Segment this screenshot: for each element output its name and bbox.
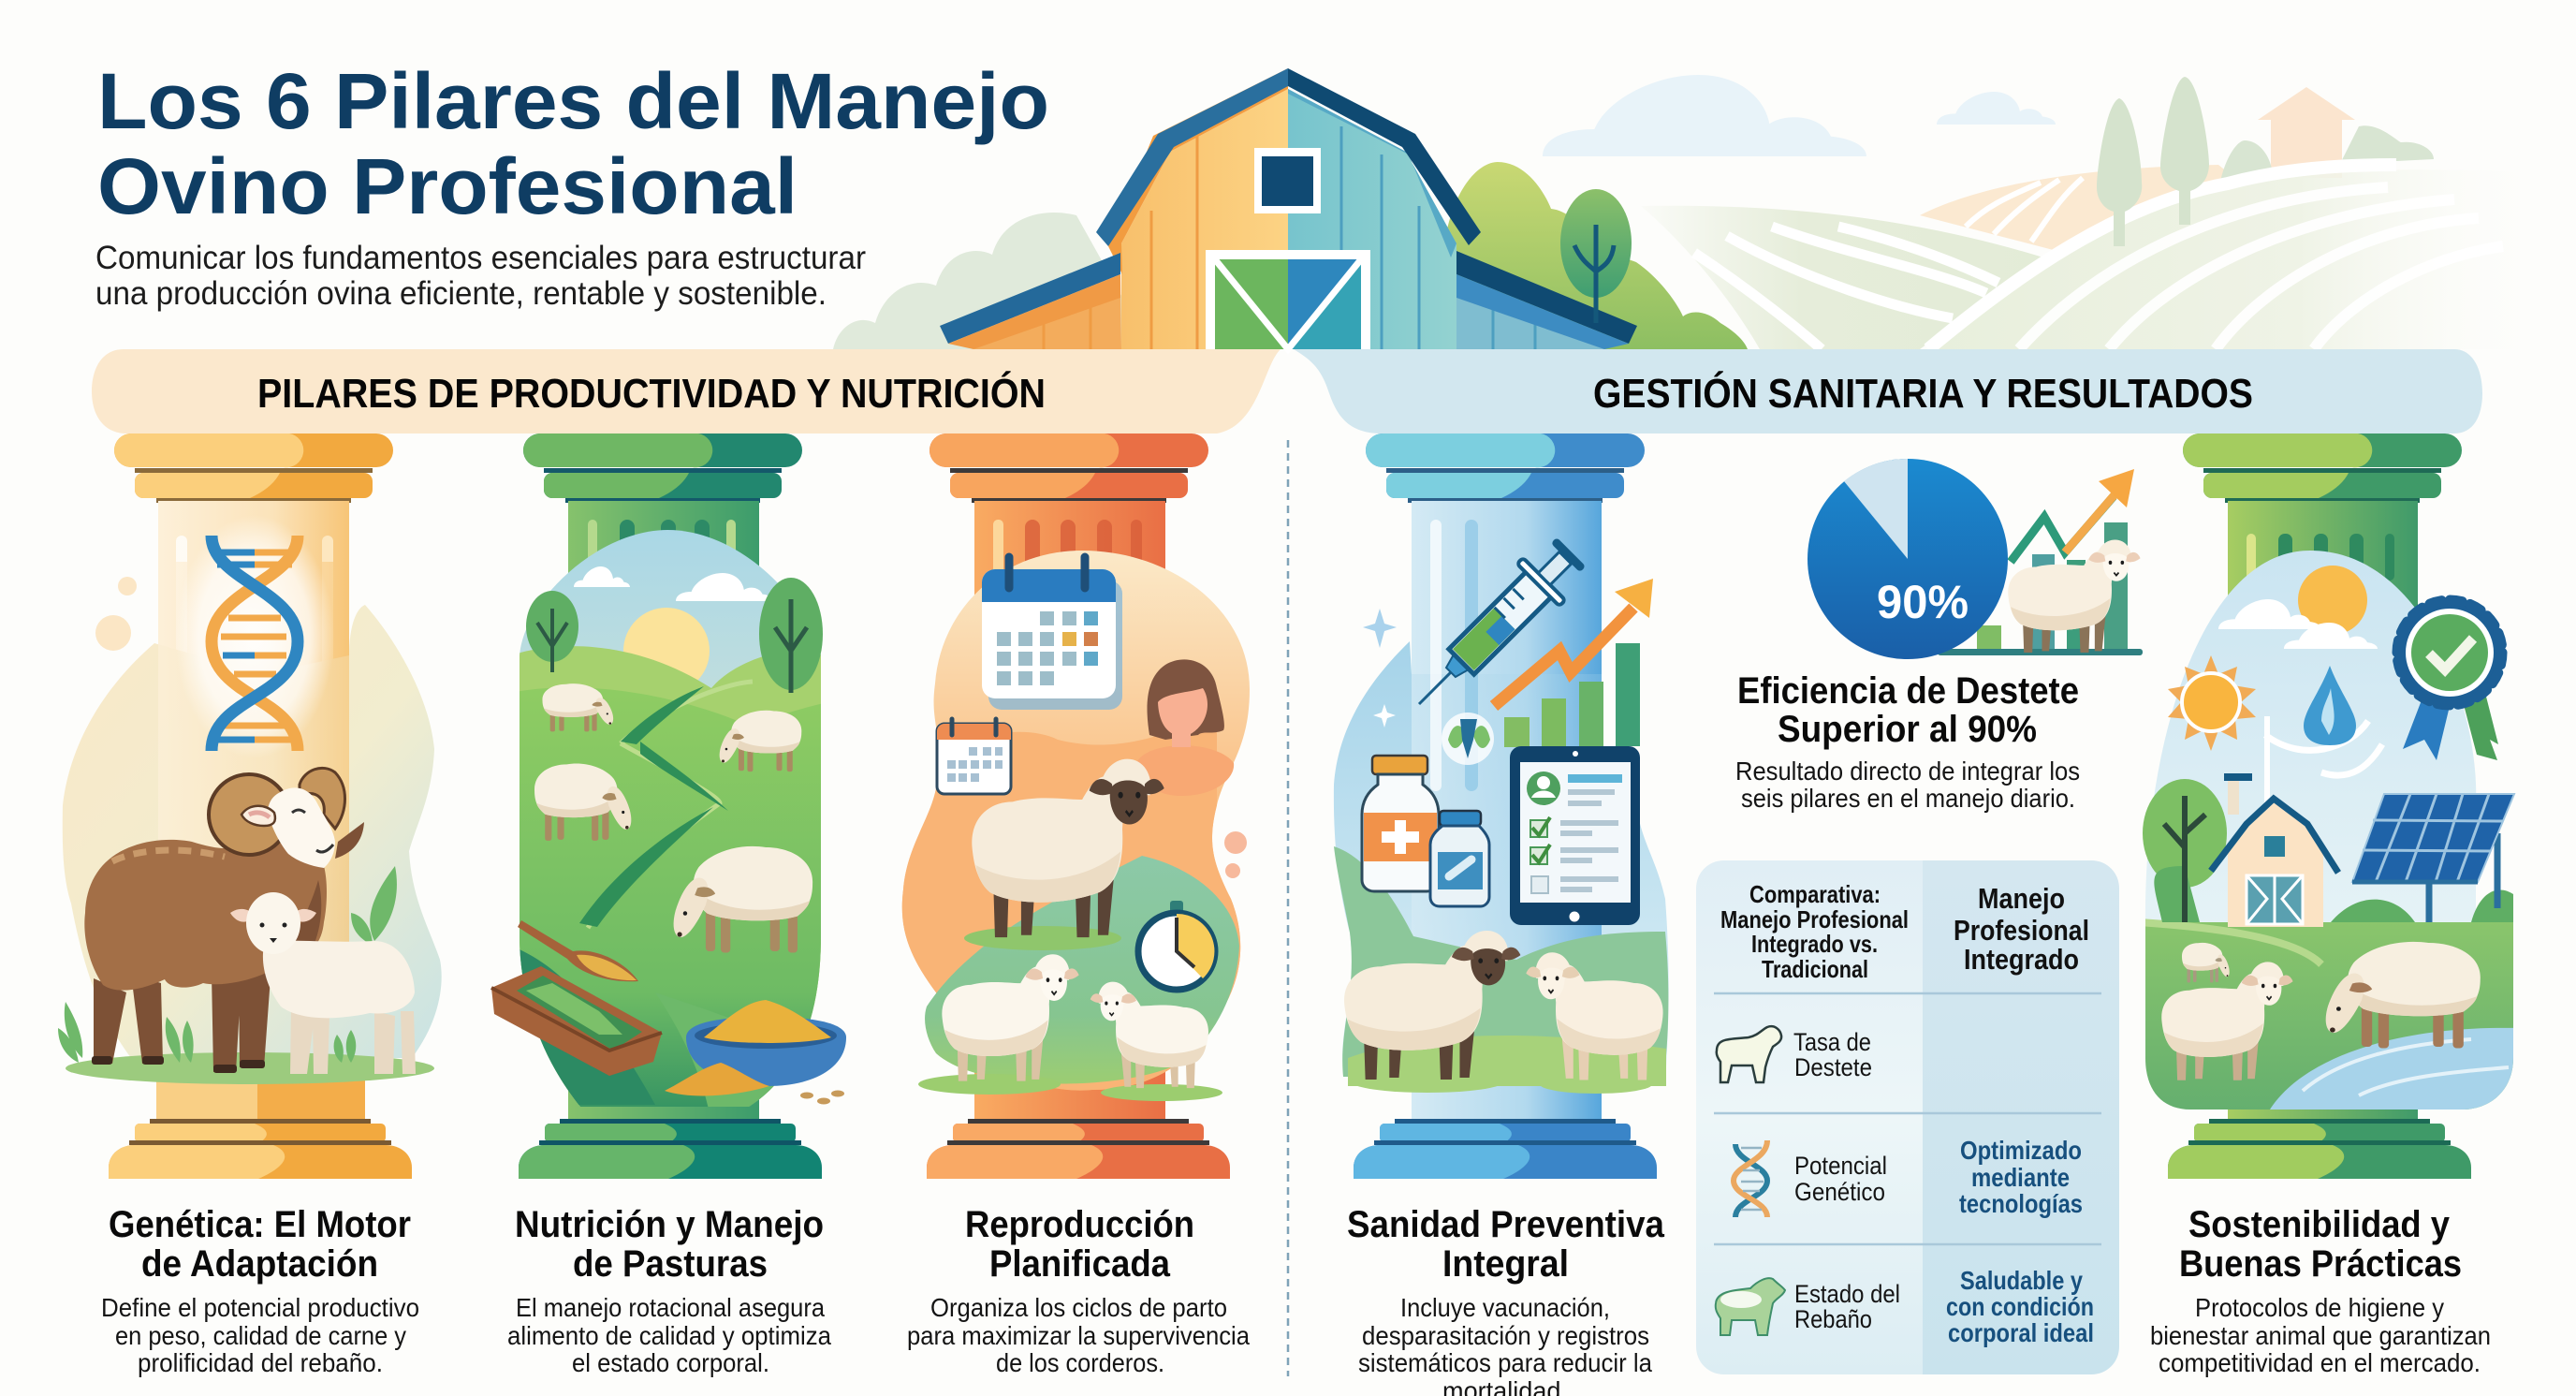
decorative dots: [1224, 831, 1247, 878]
table header left: Tradicional: [1762, 955, 1868, 983]
value: optimizado: tecnologías: [1959, 1189, 2083, 1218]
value: saludable: Saludable y: [1960, 1266, 2083, 1295]
card text: reproducción: Planificada: [989, 1243, 1171, 1285]
bushes: [2331, 889, 2513, 922]
row: potencial genético: [1794, 1152, 1887, 1206]
card text: sostenibilidad: competitividad en el mercado.: [2159, 1348, 2481, 1377]
pale bushes left of barn: [833, 213, 1151, 349]
icon: stopwatch: [1138, 901, 1215, 990]
blob background: [902, 551, 1250, 1091]
row: tasa de destete: Destete: [1794, 1053, 1872, 1081]
pillar 4: sanidad: [1334, 433, 1669, 1179]
value: saludable: con condición: [1946, 1292, 2094, 1321]
pillar 6: sostenibilidad: [2139, 433, 2523, 1179]
band: productividad y nutrición: PILARES DE PRODUCTIVIDAD Y NUTRICIÓN: [257, 370, 1046, 417]
bowl of feed: [665, 1000, 846, 1105]
band: gestión sanitaria y resultados: [1294, 349, 2482, 433]
results description: [1735, 757, 2080, 813]
card text: genética: de Adaptación: [141, 1243, 378, 1285]
card text: genética: [101, 1204, 419, 1377]
card text: genética: Genética: El Motor: [109, 1204, 411, 1245]
table header left: Manejo Profesional: [1720, 905, 1909, 933]
row: estado del rebaño: Rebaño: [1794, 1305, 1872, 1333]
card text: sanidad: sistemáticos para reducir la: [1358, 1348, 1652, 1377]
chart behind the sheep: [1938, 469, 2143, 655]
tree by barn: [1560, 189, 1632, 298]
card text: sostenibilidad: bienestar animal que garantizan: [2150, 1321, 2491, 1350]
icon: quality badge: [2397, 600, 2502, 760]
sparkles: [1363, 609, 1397, 727]
plants: [58, 866, 397, 1063]
row: tasa de destete: Tasa de: [1793, 1028, 1871, 1056]
icon: small calendar: [937, 719, 1011, 794]
ewe: [964, 926, 1121, 950]
results description: Resultado directo de integrar los: [1735, 757, 2080, 786]
icon: green sheep: [1716, 1278, 1785, 1335]
clouds: [1543, 75, 2056, 156]
icon: water drop: [2304, 666, 2356, 745]
card text: nutrición: de Pasturas: [573, 1243, 768, 1285]
icon: syringe: [1398, 531, 1592, 726]
row: potencial genético: Genético: [1794, 1178, 1885, 1206]
icon: farmhouse: [2211, 773, 2338, 927]
landscape background: [833, 75, 2546, 349]
bar chart: [1504, 643, 1640, 747]
card text: reproducción: [907, 1204, 1250, 1377]
table header right: Integrado: [1964, 943, 2079, 976]
green bushes right of barn: [1432, 162, 1748, 349]
row: tasa de destete: [1793, 1028, 1872, 1081]
card text: reproducción: Organiza los ciclos de parto: [930, 1293, 1227, 1322]
cypress trees: [2097, 98, 2142, 246]
lamb: [230, 892, 416, 1074]
table header right: [1954, 882, 2089, 976]
value: optimizado: [1959, 1136, 2083, 1218]
value: optimizado: Optimizado: [1960, 1136, 2082, 1165]
results: pie and growth: [1808, 459, 2143, 659]
decorative dots: [95, 577, 137, 651]
subtitle: una producción ovina eficiente, rentable y sostenible.: [95, 275, 827, 312]
title: Ovino Profesional: [97, 142, 798, 230]
card text: sanidad: Incluye vacunación,: [1400, 1293, 1610, 1322]
card text: sostenibilidad: Sostenibilidad y: [2188, 1204, 2451, 1245]
trees: [526, 578, 823, 693]
card text: nutrición: Nutrición y Manejo: [515, 1204, 824, 1245]
ram: [84, 768, 364, 1073]
title: [97, 57, 1049, 230]
card text: genética: en peso, calidad de carne y: [115, 1321, 406, 1350]
card text: reproducción: Reproducción: [965, 1204, 1194, 1245]
card text: nutrición: El manejo rotacional asegura: [516, 1293, 825, 1322]
icon: medicine bottles: [1362, 756, 1489, 906]
meadow: [925, 856, 1239, 1084]
village silhouette: [2258, 87, 2355, 178]
sheep group: [2161, 942, 2481, 1080]
card text: genética: Define el potencial productivo: [101, 1293, 419, 1322]
icon: sun: [2168, 655, 2256, 751]
card text: reproducción: para maximizar la supervivencia: [907, 1321, 1250, 1350]
results heading: Eficiencia de Destete: [1737, 670, 2079, 712]
scoop: [518, 920, 638, 981]
card text: nutrición: el estado corporal.: [572, 1348, 769, 1377]
pillar 3: reproducción: [902, 433, 1250, 1179]
card text: genética: prolificidad del rebaño.: [138, 1348, 383, 1377]
lambs: [918, 954, 1222, 1101]
blob background: [63, 605, 442, 1058]
card text: sostenibilidad: [2150, 1204, 2491, 1377]
pie chart: [1808, 459, 2008, 659]
pie chart: 90%: [1877, 576, 1969, 628]
table header right: Manejo: [1978, 882, 2065, 915]
card text: nutrición: alimento de calidad y optimiza: [507, 1321, 831, 1350]
scene background: [2139, 543, 2523, 1119]
card text: sostenibilidad: Buenas Prácticas: [2179, 1243, 2462, 1285]
icon: tree: [2143, 779, 2227, 922]
divider: [1287, 440, 1289, 1376]
icon: tablet with checklist: [1510, 746, 1640, 925]
orange field: [1920, 165, 2247, 253]
roof: [1108, 68, 1288, 274]
results description: seis pilares en el manejo diario.: [1741, 784, 2075, 813]
row: potencial genético: Potencial: [1794, 1152, 1887, 1180]
card text: sostenibilidad: Protocolos de higiene y: [2195, 1293, 2444, 1322]
value: saludable: corporal ideal: [1948, 1318, 2094, 1347]
table header left: Integrado vs.: [1751, 930, 1878, 958]
card text: sanidad: [1347, 1204, 1665, 1396]
card text: sanidad: desparasitación y registros: [1362, 1321, 1649, 1350]
band: productividad y nutrición: [92, 349, 1281, 433]
icon: DNA small: [1734, 1140, 1767, 1217]
row: estado del rebaño: [1794, 1280, 1900, 1333]
icon: large calendar: [982, 557, 1122, 710]
trough: [491, 966, 662, 1076]
results heading: [1737, 670, 2079, 750]
table header left: Comparativa:: [1749, 880, 1881, 908]
card text: nutrición: [507, 1204, 831, 1377]
pillar titles and descriptions: [101, 1204, 2491, 1396]
icon: sheep outline: [1717, 1026, 1781, 1082]
barn door: [1206, 250, 1370, 349]
hills: [1334, 846, 1668, 1077]
barn right wall: [1288, 89, 1456, 349]
fields right: [1928, 169, 2546, 349]
table header left: [1720, 880, 1909, 983]
value: optimizado: mediante: [1971, 1163, 2070, 1192]
blob background: [1334, 641, 1669, 1067]
card text: sanidad: Sanidad Preventiva: [1347, 1204, 1665, 1245]
table header right: Profesional: [1954, 914, 2089, 947]
barn: [940, 68, 1637, 349]
icon: emblem: [1442, 713, 1494, 765]
card text: reproducción: de los corderos.: [996, 1348, 1164, 1377]
card text: sanidad: Integral: [1442, 1243, 1569, 1285]
pillar 1: genética: [58, 433, 442, 1179]
barn left wall: [1121, 89, 1288, 349]
title: Los 6 Pilares del Manejo: [97, 57, 1049, 145]
arrow: [1494, 579, 1653, 706]
value: saludable: [1946, 1266, 2094, 1347]
row: estado del rebaño: Estado del: [1794, 1280, 1900, 1308]
ground: [66, 1052, 434, 1084]
grazing sheep: [534, 683, 812, 953]
results heading: Superior al 90%: [1778, 709, 2037, 750]
subtitle: [95, 240, 866, 312]
icon: DNA: [212, 536, 298, 751]
sheep in chart: [2008, 539, 2141, 653]
subtitle: Comunicar los fundamentos esenciales para estructurar: [95, 240, 866, 276]
pillar 2: nutrición: [491, 433, 846, 1179]
sheep pair: [1344, 931, 1663, 1094]
pasture scene: [510, 524, 828, 1124]
person: [1136, 659, 1234, 796]
icon: solar panel: [2352, 794, 2514, 922]
barn window: [1254, 148, 1321, 213]
fields left: [1641, 206, 2043, 349]
comparison table: [1696, 860, 2119, 1374]
band: gestión sanitaria y resultados: GESTIÓN SANITARIA Y RESULTADOS: [1593, 370, 2253, 417]
